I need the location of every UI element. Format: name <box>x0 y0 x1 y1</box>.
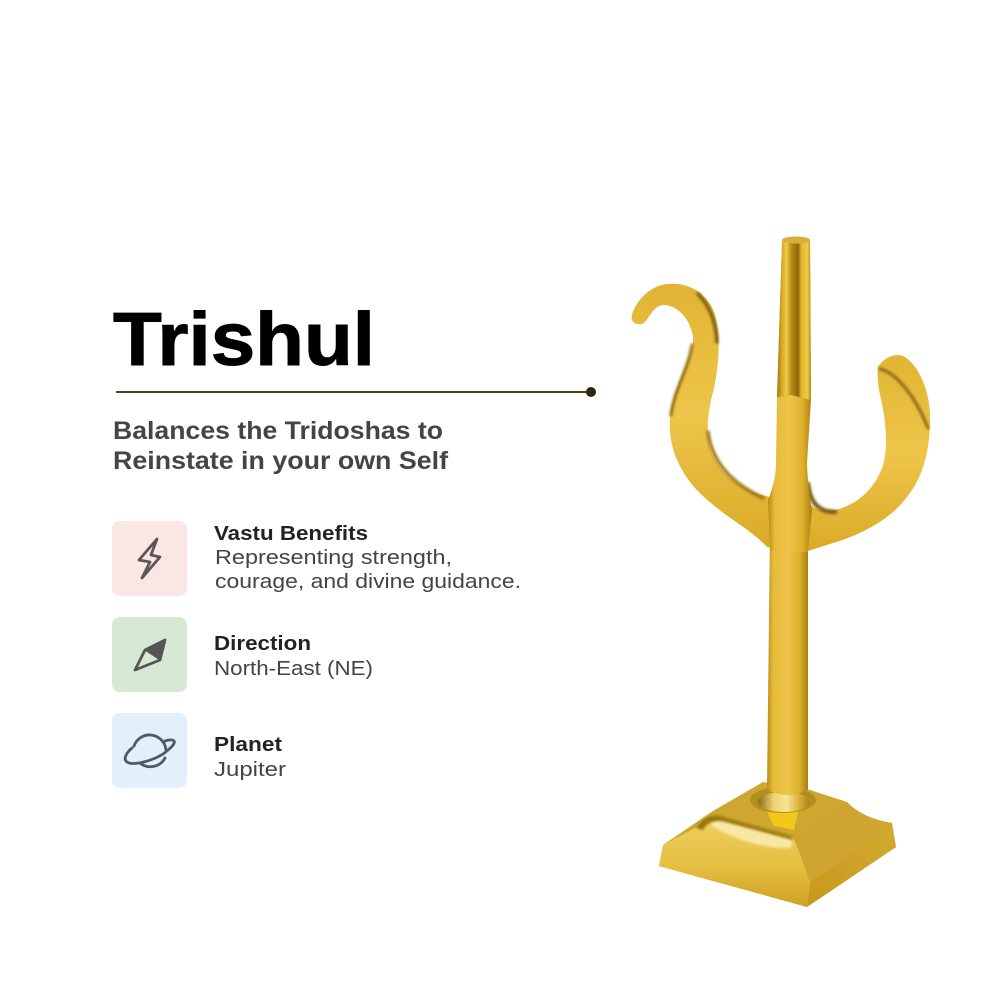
text: direction <box>214 633 373 680</box>
title: Trishul <box>113 297 375 381</box>
text: direction: Direction <box>214 633 311 655</box>
centre tine reflection <box>777 238 811 400</box>
subtitle: Balances the Tridoshas to <box>113 417 443 445</box>
left arm highlights <box>671 294 763 498</box>
icon: lightning bolt <box>112 521 187 596</box>
text: vastu benefits: courage, and divine guidance. <box>215 571 521 593</box>
centre tine <box>768 238 812 552</box>
base <box>659 782 896 907</box>
right arm highlights <box>808 369 928 512</box>
item: vastu benefits <box>112 521 521 596</box>
icon: ringed planet <box>112 713 187 788</box>
subtitle <box>113 417 449 475</box>
text: vastu benefits <box>214 523 521 593</box>
base right slope <box>793 802 892 883</box>
item: planet <box>112 713 286 788</box>
tine top cap <box>782 236 810 244</box>
icon: compass needle <box>112 617 187 692</box>
subtitle: Reinstate in your own Self <box>113 447 449 475</box>
base silhouette and plateau <box>659 782 896 907</box>
base right lip <box>807 825 896 907</box>
text: planet: Jupiter <box>214 759 286 781</box>
left arm <box>632 284 775 548</box>
collar <box>750 787 816 830</box>
right arm <box>805 355 930 552</box>
base front reflection <box>711 820 792 848</box>
divider line with dot <box>116 387 596 397</box>
base front face <box>659 815 810 907</box>
base front shadow edge <box>696 815 793 840</box>
text: planet: Planet <box>214 734 282 756</box>
text: planet <box>214 734 286 781</box>
item: direction <box>112 617 373 692</box>
text: vastu benefits: Vastu Benefits <box>214 523 368 545</box>
product: brass trishul <box>632 236 930 907</box>
text: vastu benefits: Representing strength, <box>215 547 452 569</box>
text: direction: North-East (NE) <box>214 658 373 680</box>
stem <box>767 530 808 795</box>
